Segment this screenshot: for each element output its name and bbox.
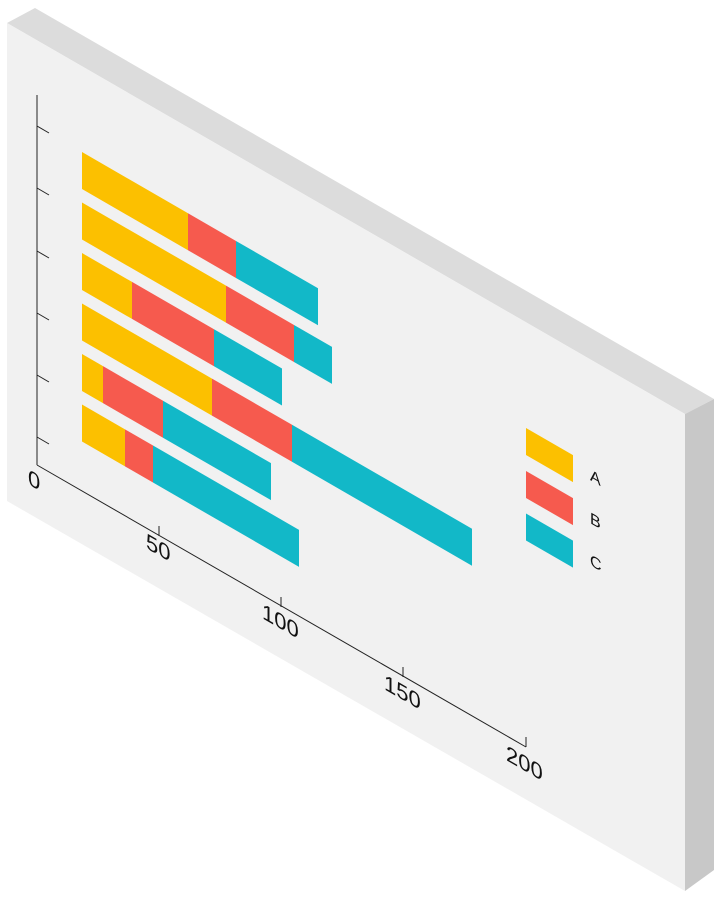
y axis bbox=[37, 95, 49, 465]
bar 6 bbox=[82, 405, 299, 567]
bar 2 bbox=[82, 203, 332, 384]
x axis labels: 50 bbox=[146, 529, 170, 568]
legend bbox=[526, 428, 602, 575]
x axis labels: 150 bbox=[384, 670, 421, 716]
board right face bbox=[685, 399, 714, 891]
legend: B bbox=[590, 508, 601, 533]
bar 3 bbox=[82, 253, 282, 406]
legend: C bbox=[590, 550, 602, 575]
legend: A bbox=[590, 465, 601, 490]
x axis labels bbox=[28, 465, 543, 787]
x axis bbox=[28, 465, 543, 787]
x axis labels: 200 bbox=[506, 741, 543, 787]
board top face bbox=[7, 8, 714, 414]
bar 5 bbox=[82, 354, 271, 500]
x axis labels: 0 bbox=[28, 465, 40, 497]
bar chart bbox=[82, 152, 472, 667]
bar 4 bbox=[82, 304, 472, 566]
bar 1 bbox=[82, 152, 318, 325]
x axis labels: 100 bbox=[262, 599, 299, 645]
